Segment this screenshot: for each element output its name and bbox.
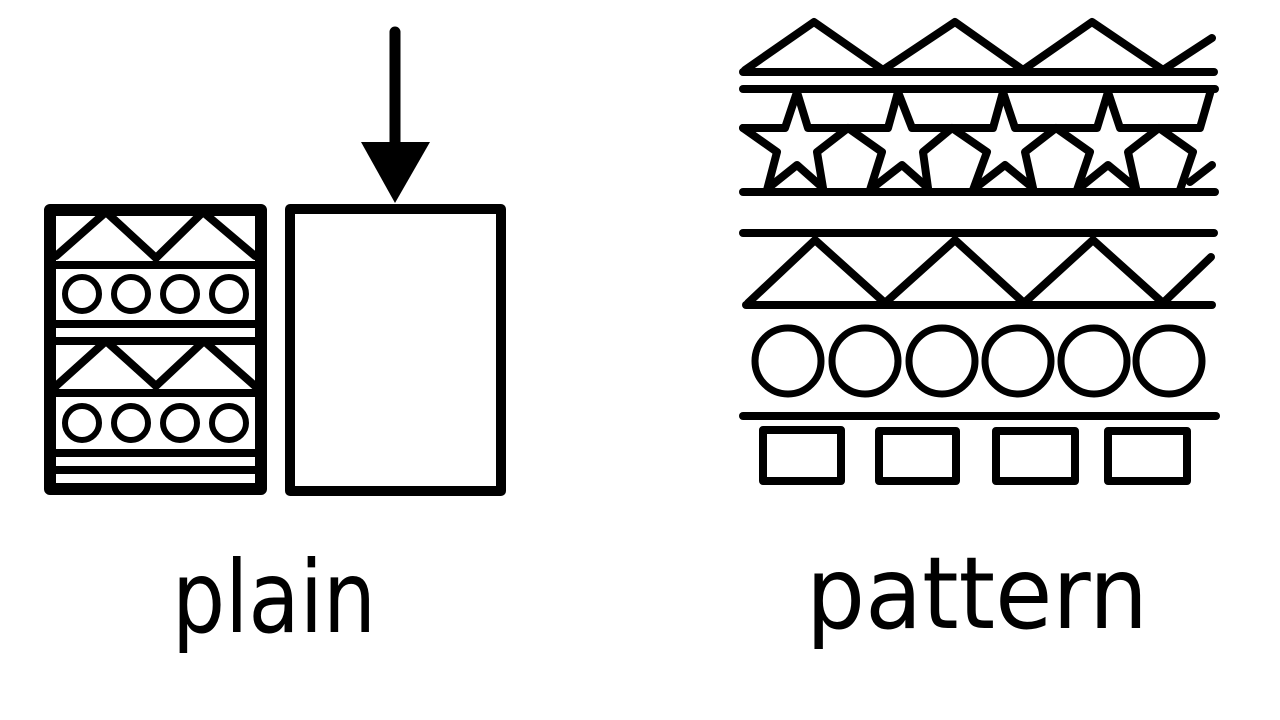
panel: plain [50, 32, 501, 656]
pattern band: triangles [743, 22, 1214, 72]
plain tile [290, 209, 501, 491]
panel: pattern [743, 22, 1216, 652]
pattern band: large triangles [743, 233, 1214, 305]
patterned tile [50, 210, 261, 489]
pattern band: stars and pentagons [743, 89, 1215, 192]
label: plain: plain [172, 539, 376, 656]
pattern band: circles [755, 328, 1202, 394]
pattern band: squares [743, 416, 1216, 481]
label: pattern: pattern [806, 535, 1148, 652]
arrow pointing to plain tile [361, 32, 430, 203]
